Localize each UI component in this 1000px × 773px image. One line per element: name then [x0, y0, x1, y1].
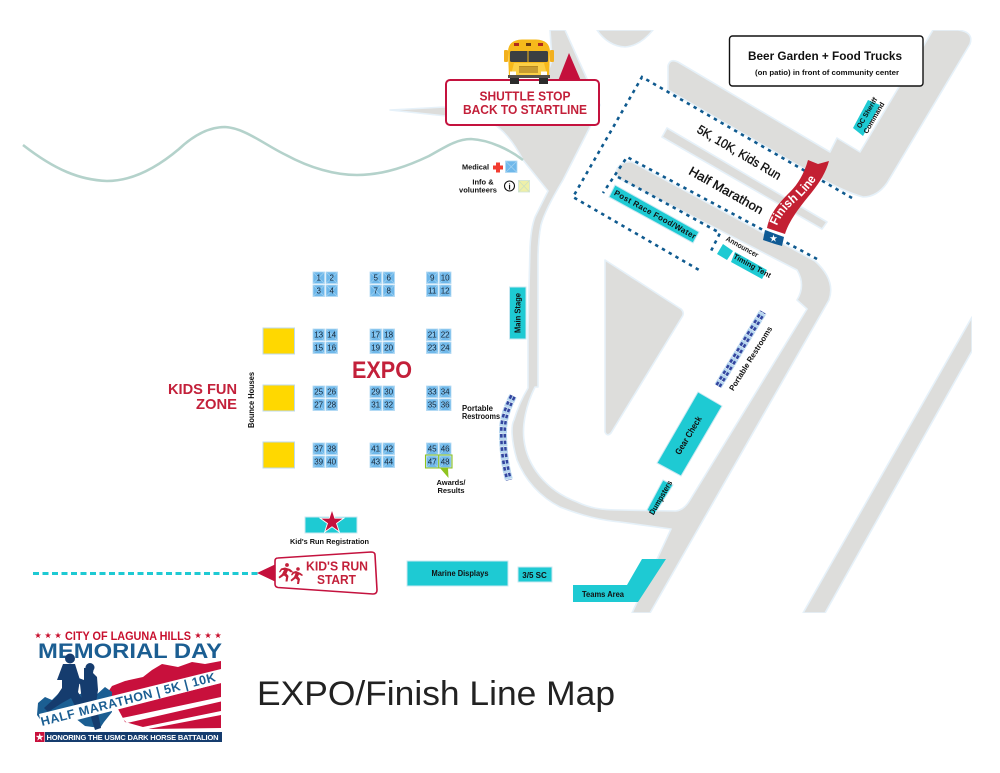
expo booths: 32 [384, 400, 394, 410]
beer garden box: Beer Garden + Food Trucks [748, 51, 902, 63]
label: 5K 10K Kids Run: 5K, 10K, Kids Run [695, 122, 784, 183]
expo booths: 30 [384, 388, 394, 396]
red pin triangle [558, 53, 581, 81]
main stage [510, 287, 526, 339]
dumpsters: Dumpsters [647, 479, 674, 516]
icon: info circle: i [508, 182, 511, 192]
portable restrooms left: Restrooms [462, 412, 500, 421]
logo white banner [39, 669, 221, 729]
expo booths: 35 [428, 400, 437, 410]
expo booths: 21 [428, 330, 437, 340]
expo booths: 28 [327, 400, 337, 410]
restroom label: Portable [462, 404, 494, 413]
expo booths: 39 [314, 458, 324, 466]
logo red brush field [108, 661, 221, 706]
kid's run start: START [317, 572, 356, 587]
expo booths: 27 [314, 400, 324, 410]
kid's run start [33, 552, 377, 594]
timing tent: Timing Tent [732, 252, 773, 280]
portable restrooms left [462, 396, 513, 480]
bounce houses label: Bounce Houses [247, 372, 256, 428]
3/5 SC [518, 567, 552, 582]
logo white stripes [122, 697, 221, 729]
post race zone boundary [618, 177, 720, 253]
course dashed boundaries [573, 77, 852, 270]
expo booths: 34 [441, 388, 450, 396]
expo booths: 1 [316, 274, 321, 282]
red ribbon [767, 160, 829, 234]
expo booths [313, 272, 451, 468]
expo booths: 33 [428, 388, 437, 396]
course labels [686, 122, 784, 217]
green pointer [440, 468, 448, 478]
expo booths: 31 [371, 400, 381, 410]
portable restrooms right [718, 312, 775, 392]
expo booths: 41 [371, 444, 381, 454]
star marker [322, 511, 342, 531]
shuttle stop callout: BACK TO STARTLINE [463, 103, 587, 117]
expo booths: 2 [329, 274, 334, 282]
expo booths: 14 [327, 330, 337, 340]
logo: City of Laguna Hills Memorial Day [35, 629, 222, 742]
main stage: Main Stage [512, 293, 522, 333]
road: thin median [662, 128, 827, 229]
expo booths: 16 [327, 344, 337, 352]
star on pennant [770, 235, 777, 242]
marine displays: Marine Displays [432, 568, 489, 578]
icon: runners [278, 563, 303, 584]
road: top parking lot and L-shaped road [668, 30, 971, 197]
expo booths: 18 [384, 330, 394, 340]
expo booths: 48 [441, 458, 450, 466]
pointer triangle [257, 564, 276, 582]
expo booths: 7 [373, 286, 378, 296]
logo stars left [35, 632, 61, 638]
expo booths: 19 [371, 344, 381, 352]
post race food and water: Post Race Food/Water [613, 188, 698, 241]
finish line banner [763, 160, 829, 246]
logo ribbon star square [35, 732, 44, 742]
kids fun zone heading: KIDS FUN [168, 381, 237, 398]
gear check [657, 392, 722, 476]
outer 5K 10K course boundary [573, 77, 852, 270]
gear check: Gear Check [673, 414, 704, 456]
expo booths: 40 [327, 458, 337, 466]
green outline on booths 47 and 48 [426, 455, 452, 468]
expo booths: 5 [373, 274, 378, 282]
shuttle stop box [446, 80, 599, 125]
logo blue brush field [37, 687, 112, 728]
logo bottom ribbon [45, 732, 222, 742]
half marathon course boundary [603, 157, 817, 259]
registration label: Kid's Run Registration [290, 537, 369, 546]
restroom strip [718, 312, 763, 386]
expo booths: 29 [371, 388, 381, 396]
road network [390, 30, 972, 613]
expo booths: 9 [430, 274, 435, 282]
teams area: Teams Area [582, 589, 624, 599]
beer garden box: (on patio) in front of community center [755, 68, 899, 77]
expo booths: 17 [371, 330, 381, 340]
awards label: Awards/ [436, 478, 466, 487]
expo booths: 25 [314, 388, 324, 396]
road: main loop [390, 30, 831, 613]
expo booths: 8 [386, 286, 391, 296]
expo booths: 10 [441, 274, 450, 282]
expo booths: 23 [428, 344, 437, 352]
expo booths: 24 [441, 344, 450, 352]
expo booths: 38 [327, 444, 337, 454]
shuttle stop text: SHUTTLE STOP [480, 90, 570, 104]
pennant blue base [763, 230, 784, 246]
expo booths: 42 [384, 444, 394, 454]
ribbon text: Finish Line [770, 176, 816, 226]
kids fun zone heading: ZONE [196, 396, 237, 413]
road: central triangle [605, 260, 683, 435]
teams area [573, 559, 666, 602]
logo race distances: HALF MARATHON | 5K | 10K [39, 670, 217, 729]
start text: KID'S RUN [306, 558, 368, 574]
expo booths: 4 [329, 286, 334, 296]
OC sheriff command [853, 96, 886, 136]
start sign [275, 552, 377, 594]
icon: school bus [504, 40, 554, 84]
expo booths: 20 [384, 344, 394, 352]
marine displays [407, 561, 508, 586]
expo booths: 46 [441, 444, 450, 454]
awards and results callout [426, 455, 466, 495]
road: far right diagonal [803, 317, 972, 613]
expo booths: 11 [428, 286, 437, 296]
awards and results callout: Results [437, 486, 465, 495]
legend: medical and info: volunteers [459, 186, 497, 194]
logo runners [44, 654, 101, 730]
logo city name: CITY OF LAGUNA HILLS [65, 629, 191, 643]
expo booths: 6 [386, 274, 391, 282]
expo booths: 36 [441, 400, 450, 410]
medical label: Medical [462, 162, 489, 172]
kids fun zone heading [168, 381, 237, 413]
title: EXPO/Finish Line Map [257, 675, 615, 713]
expo booths: 13 [314, 330, 324, 340]
expo booths: 3 [316, 286, 321, 296]
logo memorial day: MEMORIAL DAY [38, 640, 222, 663]
expo booths: 47 [428, 458, 437, 466]
expo booths: 37 [314, 444, 324, 454]
3/5 SC: 3/5 SC [522, 571, 547, 580]
expo heading: EXPO [352, 357, 412, 384]
restroom strip [503, 396, 513, 480]
road: top curved blob [597, 30, 653, 47]
icon: red cross [493, 162, 503, 172]
info label: Info & [472, 178, 494, 186]
kid's run registration [290, 511, 369, 546]
expo booths: 12 [441, 286, 450, 296]
expo booths: 26 [327, 388, 337, 396]
restroom label: Portable Restrooms [727, 324, 775, 392]
OC sheriff command: Command [863, 101, 886, 135]
shuttle stop callout [446, 40, 599, 125]
beer garden box [730, 36, 923, 86]
label: half marathon: Half Marathon [686, 164, 766, 217]
cyan dashed route [33, 572, 258, 575]
logo stars right [195, 632, 221, 638]
logo ribbon text: HONORING THE USMC DARK HORSE BATTALION [46, 733, 218, 742]
registration tent [305, 517, 357, 533]
expo booths: 44 [384, 458, 394, 466]
bounce houses [247, 328, 294, 468]
river [23, 127, 523, 181]
info tent marker [518, 180, 530, 192]
medical tent marker [506, 161, 517, 172]
expo booths: 43 [371, 458, 381, 466]
expo booths: 22 [441, 330, 450, 340]
announcer: Announcer [724, 234, 760, 260]
expo booths: 15 [314, 344, 324, 352]
OC sheriff command: OC Sheriff [856, 96, 880, 130]
expo booths: 45 [428, 444, 437, 454]
legend: medical and info [459, 161, 530, 194]
